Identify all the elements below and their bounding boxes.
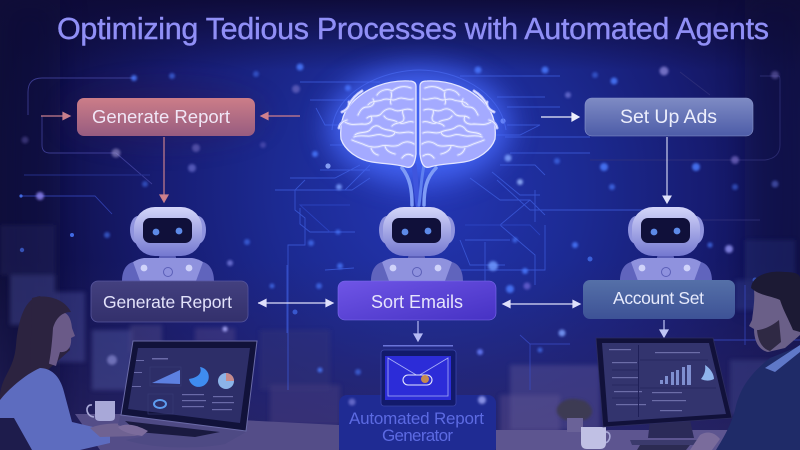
man at monitor xyxy=(637,272,800,450)
box: Account Set: Account Set xyxy=(613,288,704,308)
coffee mug right xyxy=(581,427,610,449)
box: Set Up Ads xyxy=(585,98,753,136)
glow dots xyxy=(19,64,779,375)
coffee mug left xyxy=(87,401,115,421)
panel: Automated Report Generator: Generator xyxy=(382,426,453,445)
panel: Automated Report Generator: Automated Report xyxy=(349,409,484,428)
desk left xyxy=(75,414,339,450)
box: Set Up Ads: Set Up Ads xyxy=(620,106,717,128)
man beard xyxy=(757,320,781,351)
brain stem xyxy=(402,165,436,205)
brain xyxy=(327,68,511,205)
arrow: Sort Emails to Account Set xyxy=(503,300,580,308)
woman hair front xyxy=(30,297,71,375)
arrow: Set Up Ads down to robot xyxy=(663,137,671,203)
title: Optimizing Tedious Processes with Automated Agents xyxy=(57,12,769,46)
box: Generate Report top: Generate Report xyxy=(92,106,230,127)
box: Sort Emails xyxy=(338,281,496,320)
laptop xyxy=(118,341,257,447)
icon: email tablet xyxy=(381,345,456,406)
box: Generate Report agent xyxy=(91,281,248,322)
man hand xyxy=(690,432,720,450)
woman hair back xyxy=(0,296,70,405)
arrow: Generate Report down to robot xyxy=(160,137,168,202)
monitor screen xyxy=(602,343,726,422)
man hair xyxy=(751,272,800,332)
box: Generate Report agent: Generate Report xyxy=(103,292,232,312)
box: Account Set xyxy=(583,280,735,319)
laptop screen xyxy=(128,348,250,423)
circuit lines xyxy=(22,72,800,390)
monitor xyxy=(596,338,732,445)
brain halo arc xyxy=(332,70,506,130)
panel: Automated Report Generator xyxy=(339,395,496,450)
blurred office backdrop xyxy=(0,225,800,435)
man suit xyxy=(716,346,800,450)
woman at laptop xyxy=(0,296,147,450)
robot centre xyxy=(371,207,463,281)
arrow: Generate Report to Sort Emails xyxy=(258,300,333,306)
monitor bars xyxy=(660,365,691,385)
man face xyxy=(749,290,800,352)
robot left xyxy=(122,207,214,281)
left hemisphere xyxy=(339,81,416,167)
arrow: Account Set to monitor xyxy=(660,320,668,337)
arrow: Sort Emails to generator xyxy=(414,321,422,341)
laptop charts xyxy=(152,370,180,384)
brain halo xyxy=(327,68,511,184)
woman face xyxy=(38,312,75,366)
arrow: into Generate Report from left xyxy=(41,112,70,120)
right hemisphere xyxy=(420,81,497,167)
laptop base xyxy=(118,416,246,447)
arrow: into Set Up Ads xyxy=(541,113,579,121)
plant xyxy=(557,399,592,432)
arrow: from brain to Generate Report xyxy=(261,112,300,120)
box: Generate Report top xyxy=(77,98,255,136)
robot right xyxy=(620,207,712,281)
woman shirt xyxy=(0,368,110,450)
box: Sort Emails: Sort Emails xyxy=(371,292,463,312)
desk right xyxy=(496,430,800,450)
